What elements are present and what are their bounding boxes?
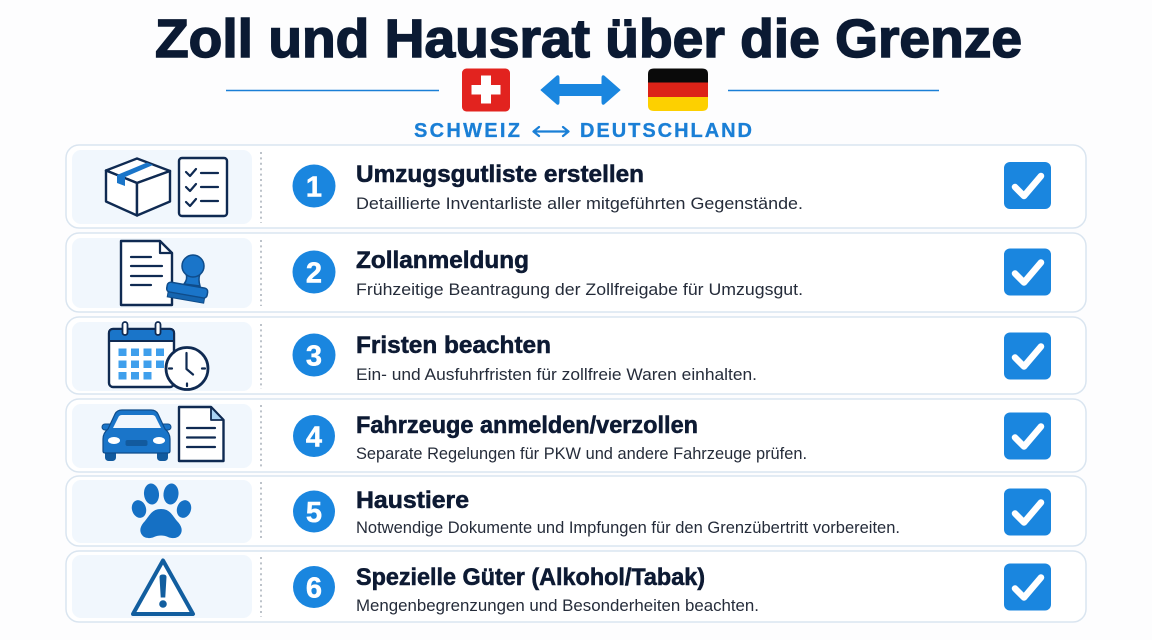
panel: step 2 xyxy=(66,233,1086,312)
checkbox 4 xyxy=(1004,412,1051,460)
icon: car and document xyxy=(102,407,224,461)
checkbox 2 xyxy=(1004,248,1051,296)
flag: Germany xyxy=(648,68,708,111)
title: Zoll und Hausrat über die Grenze xyxy=(155,9,1022,69)
subtitle: Schweiz and Deutschland: DEUTSCHLAND xyxy=(580,120,752,142)
checkbox 5 xyxy=(1004,488,1051,536)
number 6: 6 xyxy=(306,572,322,604)
panel: step 5 xyxy=(66,476,1086,546)
icon: warning triangle xyxy=(133,560,193,614)
number 2: 2 xyxy=(306,258,322,290)
icon: box and checklist xyxy=(106,158,227,216)
arrow: double-headed between flags xyxy=(541,76,620,104)
number 3: 3 xyxy=(306,340,322,372)
number 4 xyxy=(293,415,335,457)
heading 5: Haustiere xyxy=(356,487,469,514)
number 5: 5 xyxy=(306,497,322,529)
text 3: Ein- und Ausfuhrfristen für zollfreie Waren einhalten. xyxy=(356,365,757,384)
text 1: Detaillierte Inventarliste aller mitgeführten Gegenstände. xyxy=(356,194,803,213)
panel: step 4 xyxy=(66,399,1086,472)
panel: step 1 xyxy=(66,145,1086,228)
number 6 xyxy=(293,566,335,608)
icon: calendar and clock xyxy=(109,322,208,390)
checkbox 3 xyxy=(1004,332,1051,380)
heading 6: Spezielle Güter (Alkohol/Tabak) xyxy=(356,564,705,591)
text 6: Mengenbegrenzungen und Besonderheiten beachten. xyxy=(356,596,759,615)
number 1: 1 xyxy=(306,172,322,204)
heading 3: Fristen beachten xyxy=(356,332,551,359)
text 2: Frühzeitige Beantragung der Zollfreigabe für Umzugsgut. xyxy=(356,280,803,299)
heading 1: Umzugsgutliste erstellen xyxy=(356,161,644,188)
subtitle: Schweiz and Deutschland: SCHWEIZ xyxy=(414,120,520,142)
panel: step 3 xyxy=(66,317,1086,394)
heading 4: Fahrzeuge anmelden/verzollen xyxy=(356,412,698,439)
icon: paw xyxy=(130,483,193,538)
number 2 xyxy=(292,250,336,294)
number 3 xyxy=(292,334,336,376)
heading 2: Zollanmeldung xyxy=(356,247,529,274)
text 4: Separate Regelungen für PKW und andere Fahrzeuge prüfen. xyxy=(356,444,807,463)
checkbox 1 xyxy=(1004,162,1051,209)
text 5: Notwendige Dokumente und Impfungen für den Grenzübertritt vorbereiten. xyxy=(356,518,900,537)
panel: step 6 xyxy=(66,551,1086,622)
number 4: 4 xyxy=(306,422,322,454)
number 5 xyxy=(293,490,335,532)
flag: Switzerland xyxy=(462,68,510,112)
icon: document and stamp xyxy=(121,241,208,305)
number 1 xyxy=(292,164,336,208)
subtitle: Schweiz and Deutschland xyxy=(414,120,752,142)
checkbox 6 xyxy=(1004,564,1051,610)
